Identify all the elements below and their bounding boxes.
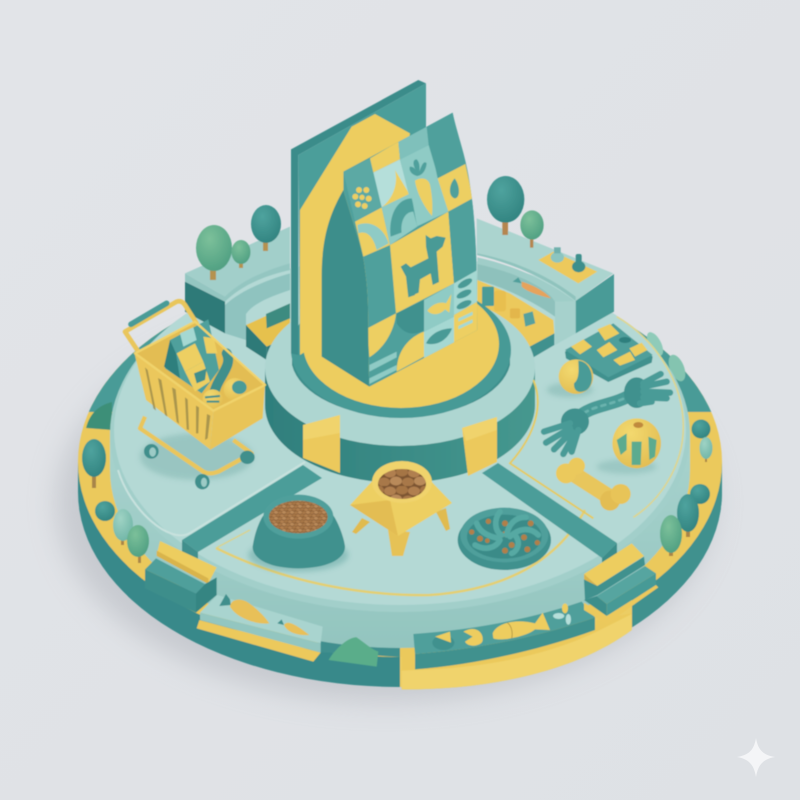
fish tray (413, 602, 595, 669)
left rim trees (82, 439, 149, 563)
teal steps (145, 558, 217, 613)
right back block (477, 218, 614, 359)
front-left items (145, 495, 378, 667)
carrot motif (410, 159, 432, 216)
main platform (110, 255, 690, 648)
basket rim (135, 322, 265, 411)
bars motif (458, 312, 473, 329)
left block trees (196, 205, 281, 280)
leaf motif (426, 328, 452, 344)
handle (125, 301, 197, 352)
left back block (185, 227, 290, 360)
toy panel (510, 317, 683, 518)
small leaves (553, 603, 571, 625)
carrot small (277, 619, 309, 635)
leaves motif (455, 276, 474, 311)
base disc (77, 325, 723, 688)
tennis ball (547, 359, 593, 397)
tree: green (520, 210, 544, 248)
carrot big (219, 594, 269, 624)
bag front face (342, 112, 478, 387)
cart balls (203, 378, 247, 409)
puzzle feeder (565, 323, 653, 382)
cart bag (164, 319, 219, 393)
bowl (248, 495, 348, 572)
pedestal upper tier (291, 280, 511, 418)
pedestal lower tier (265, 290, 535, 483)
rim back shapes (86, 330, 689, 430)
pie shape (432, 632, 454, 650)
rope toy (544, 374, 670, 454)
peg board (538, 247, 597, 283)
illustration scene (78, 80, 722, 689)
dental ball (597, 418, 661, 474)
fish (493, 613, 550, 639)
carrot tray (197, 595, 323, 662)
back panel of bag (291, 80, 426, 355)
dog motif (401, 235, 446, 297)
left panel surface edge (118, 462, 305, 535)
food bag (322, 103, 483, 390)
fish motif (427, 294, 451, 314)
yellow chomp (463, 629, 483, 646)
green mound (329, 637, 378, 667)
cart rope (213, 353, 228, 397)
shopping cart (125, 301, 265, 489)
front-right items (402, 508, 658, 689)
basket front left (134, 352, 213, 449)
frame (140, 417, 252, 473)
right rim trees (660, 420, 712, 556)
flower motif (352, 187, 372, 209)
small carrot (513, 277, 551, 298)
yellow step (584, 543, 644, 590)
cart shadow (140, 433, 253, 480)
wheels (144, 444, 255, 489)
teal steps (584, 557, 656, 616)
basket front right (210, 384, 265, 450)
slow feeder bowl (458, 508, 551, 570)
basket back (135, 322, 265, 412)
tray blocks (482, 287, 535, 327)
front yellow rim block (402, 613, 632, 689)
bone (556, 458, 631, 511)
right block decorations (482, 176, 597, 327)
yellow rim under steps (584, 585, 658, 624)
drop motif (450, 178, 459, 198)
ground shadow (57, 305, 713, 701)
panel dividers (182, 463, 617, 569)
sparkle watermark (737, 738, 775, 777)
tree: teal (487, 176, 524, 235)
bag gusset (322, 190, 369, 387)
raised bowl (350, 461, 452, 556)
yellow step (157, 541, 217, 584)
